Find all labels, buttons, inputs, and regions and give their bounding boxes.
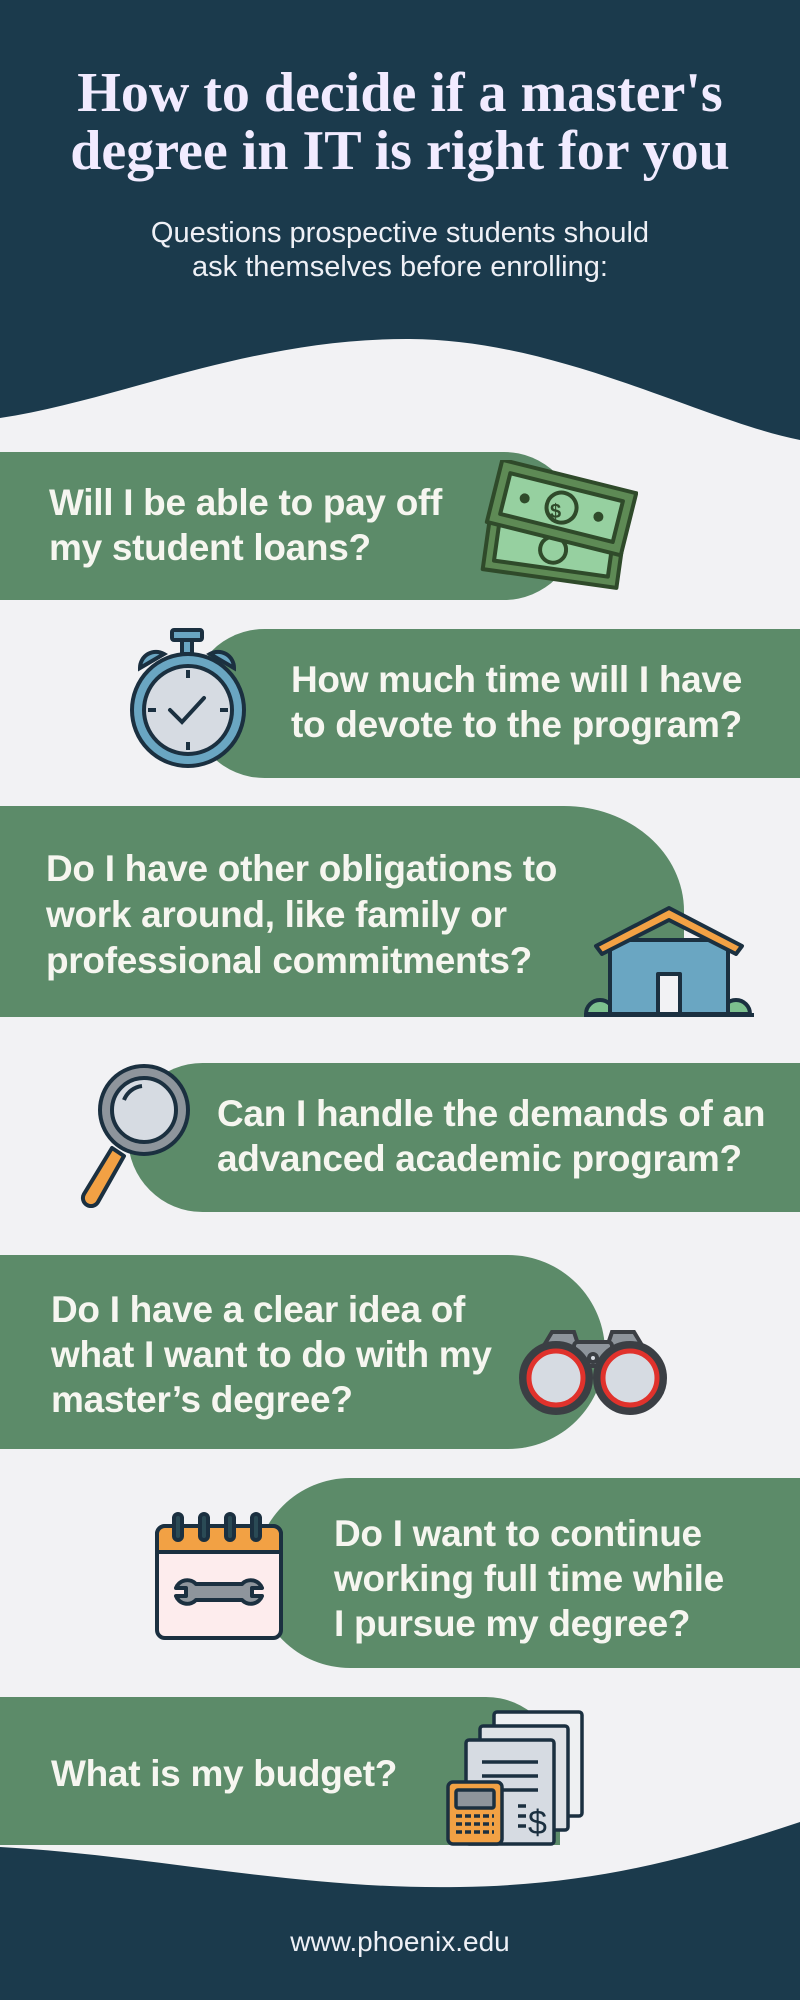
- panel 3: obligations: [0, 806, 684, 1017]
- icon: calendar: [155, 1512, 283, 1640]
- panel 1: student loans: [0, 452, 578, 600]
- panel 2: time: [190, 629, 800, 778]
- panel 2: time: How much time will I have: [291, 659, 742, 700]
- footer url: www.phoenix.edu: [290, 1926, 510, 1957]
- subtitle: ask themselves before enrolling:: [192, 251, 608, 283]
- panel 6: working full time: [255, 1478, 800, 1668]
- panel 6: working full time: I pursue my degree?: [334, 1603, 690, 1644]
- title: degree in IT is right for you: [70, 120, 730, 182]
- title: How to decide if a master's: [77, 62, 723, 124]
- title: [70, 62, 730, 182]
- panel 5: clear idea: [0, 1255, 605, 1449]
- panel 3: obligations: professional commitments?: [46, 940, 532, 981]
- panel 5: clear idea: what I want to do with my: [51, 1334, 492, 1375]
- panel 6: working full time: Do I want to continue: [334, 1513, 702, 1554]
- panel 4: demands: Can I handle the demands of an: [217, 1093, 765, 1134]
- panel 5: clear idea: master’s degree?: [51, 1379, 353, 1420]
- header background with wave: [0, 0, 800, 440]
- icon: budget documents and calculator: [446, 1710, 584, 1846]
- icon: money: [480, 460, 638, 590]
- icon: binoculars: [519, 1330, 667, 1415]
- panel 4: demands: [128, 1063, 800, 1212]
- icon: budget documents and calculator: $: [528, 1804, 547, 1842]
- icon: money: $: [550, 501, 561, 523]
- panel 3: obligations: work around, like family or: [46, 894, 507, 935]
- panel 7: budget: What is my budget?: [51, 1753, 397, 1794]
- subtitle: Questions prospective students should: [151, 217, 649, 249]
- panel 7: budget: [0, 1697, 560, 1845]
- icon: stopwatch: [130, 628, 246, 768]
- panel 2: time: to devote to the program?: [291, 704, 742, 745]
- panel 3: obligations: Do I have other obligations to: [46, 848, 557, 889]
- footer background with wave: [0, 1822, 800, 2000]
- subtitle: [151, 217, 649, 283]
- panel 6: working full time: working full time while: [334, 1558, 724, 1599]
- panel 1: student loans: Will I be able to pay off: [49, 482, 442, 523]
- panel 5: clear idea: Do I have a clear idea of: [51, 1289, 465, 1330]
- panel 1: student loans: my student loans?: [49, 527, 371, 568]
- icon: magnifier: [80, 1064, 190, 1208]
- icon: house: [584, 906, 754, 1017]
- panel 4: demands: advanced academic program?: [217, 1138, 742, 1179]
